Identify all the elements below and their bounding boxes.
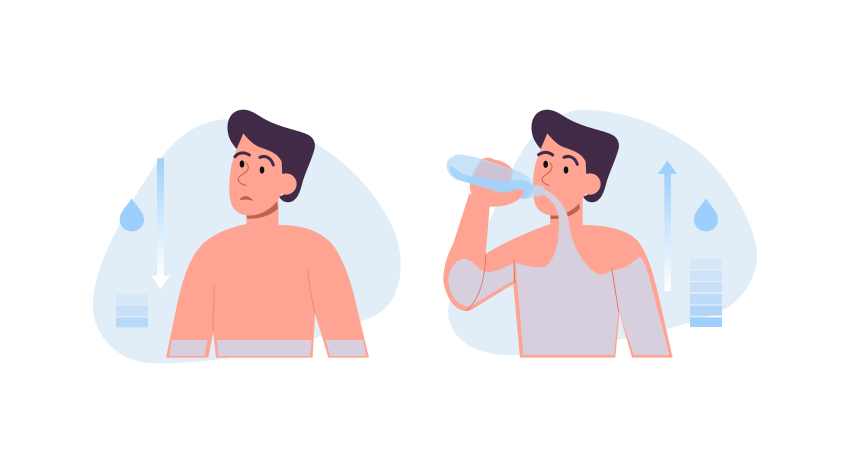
- thumb: [502, 189, 524, 206]
- gray water fill: right arm: [613, 257, 669, 355]
- neck shadow: [551, 203, 580, 219]
- gray water fill: arm: [448, 259, 513, 307]
- neck shadow: [247, 202, 278, 219]
- panel: man drinking water: [443, 110, 757, 358]
- eyes and brows: [543, 161, 548, 168]
- torso: [166, 200, 369, 358]
- full water level bars: [690, 259, 722, 327]
- mouth: [240, 196, 253, 201]
- fingers: [472, 158, 513, 183]
- background blob left: [93, 119, 401, 363]
- background blob right: [448, 110, 757, 355]
- ear: [275, 173, 297, 195]
- low water level bars: [116, 294, 148, 327]
- ear: [579, 173, 601, 195]
- arm creases: [466, 254, 619, 312]
- arrow down: [151, 158, 170, 289]
- gray water fill: torso: [515, 225, 618, 355]
- head: [531, 110, 619, 225]
- arrow up: [658, 160, 677, 291]
- hand: [470, 175, 524, 207]
- gray water in fist: [473, 161, 512, 182]
- nose: [542, 163, 552, 185]
- water bottle: [447, 155, 544, 199]
- icon: water drop: [120, 198, 144, 231]
- hair: [531, 110, 619, 202]
- gray water-level bands: [169, 340, 366, 356]
- icon: water drop: [694, 198, 718, 231]
- torso and arms: [443, 193, 673, 358]
- hair: [227, 110, 315, 202]
- head: [227, 110, 315, 225]
- water stream in throat: [542, 189, 569, 227]
- nose: [238, 163, 248, 185]
- panel: dehydrated man: [93, 110, 401, 363]
- water in bottle: [449, 166, 533, 198]
- eyes and brows: [240, 160, 244, 168]
